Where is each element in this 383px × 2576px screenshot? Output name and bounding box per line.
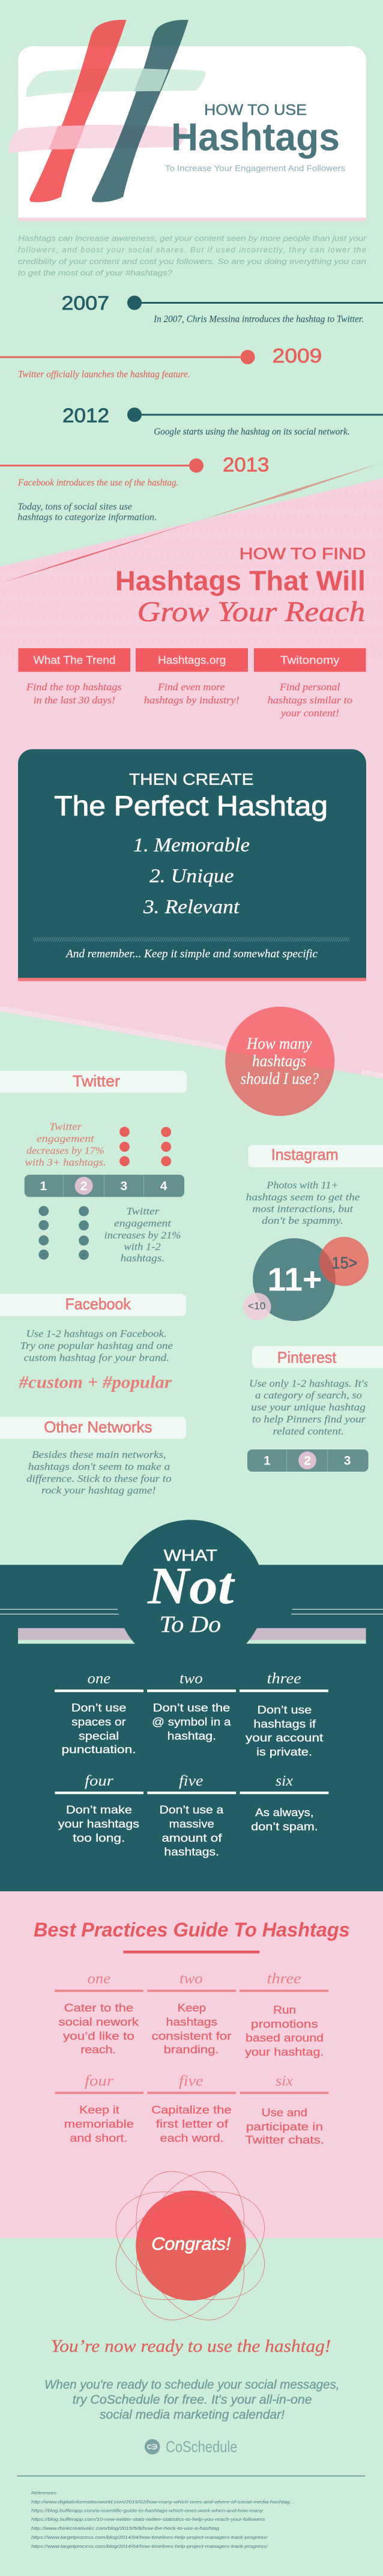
rule two: @ symbol in a: [152, 1716, 232, 1728]
panel: pinterest: Pinterest: [277, 1349, 337, 1367]
timeline: 2012: Google starts using the hashtag on its social network.: [154, 427, 350, 437]
practice one: reach.: [80, 2044, 116, 2056]
mint section background: [0, 1011, 383, 1565]
twitter increase text: [104, 1205, 181, 1264]
panel: what the trend: [18, 648, 130, 706]
hash pattern: #############################################################: [0, 562, 383, 571]
twitter increase text: with 1-2: [124, 1241, 161, 1252]
panel: what the trend: Find the top hashtags: [26, 681, 122, 693]
closing paragraph: [44, 2378, 340, 2422]
rule three: hashtags if: [253, 1718, 316, 1730]
hash pattern: #############################################################: [0, 550, 383, 559]
timeline: 2013: Facebook introduces the use of the hashtag.: [17, 478, 178, 488]
heading: grow your reach: Grow Your Reach: [137, 596, 365, 628]
intro paragraph: Hashtags can increase awareness, get your content seen by more people than just your: [18, 234, 367, 243]
practice five: five: [179, 2073, 203, 2089]
heading: how to find: HOW TO FIND: [240, 545, 366, 563]
logo: coschedule: CoSchedule: [166, 2438, 238, 2456]
closing note: And remember... Keep it simple and somewhat specific: [65, 948, 318, 960]
timeline: 2012: 2012: [62, 404, 109, 426]
closing paragraph: social media marketing calendar!: [100, 2408, 285, 2422]
practice four: and short.: [70, 2132, 127, 2144]
hash pattern: #############################################################: [0, 488, 383, 497]
rule one: Don’t use: [71, 1702, 126, 1714]
pink diagonal shape: [0, 478, 383, 1080]
timeline: 2007: In 2007, Chris Messina introduces the hashtag to Twitter.: [153, 314, 364, 325]
hash pattern: #############################################################: [0, 600, 383, 609]
panel: best practices: [0, 1891, 383, 2238]
references: References:: [31, 2490, 58, 2496]
title: hashtags: Hashtags: [171, 115, 340, 159]
panel: hashtags.org: [136, 648, 248, 706]
hash pattern: #############################################################: [0, 526, 383, 534]
logo: coschedule: [145, 2438, 238, 2456]
hash pattern: [0, 488, 383, 659]
hash pattern: #############################################################: [0, 588, 383, 597]
practice three: [240, 1970, 328, 2058]
panel: pink section background: [0, 960, 383, 1014]
rule three: is private.: [256, 1746, 312, 1758]
rule five: [147, 1773, 236, 1858]
hash pattern: #############################################################: [0, 649, 383, 659]
coral dots: -: [165, 1129, 167, 1135]
panel: twitonomy: your content!: [280, 707, 339, 718]
facebook text: Try one popular hashtag and one: [20, 1340, 173, 1351]
heading: how to find: [115, 545, 366, 628]
twitter decrease text: decreases by 17%: [26, 1145, 104, 1156]
twitter decrease text: [25, 1121, 106, 1168]
panel: the perfect hashtag: [18, 749, 366, 981]
callout: how many hashtags: How many: [246, 1034, 312, 1052]
panel: twitonomy: Find personal: [279, 681, 340, 693]
rule one: punctuation.: [61, 1744, 136, 1756]
panel: hashtags.org: hashtags by industry!: [144, 694, 240, 706]
hash pattern: #############################################################: [0, 513, 383, 522]
panel: what the trend: What The Trend: [34, 654, 116, 666]
practice one: Cater to the: [64, 2002, 133, 2014]
number bar: [25, 1175, 184, 1197]
title: how to use: HOW TO USE: [204, 103, 307, 119]
bubble chart: 15>: [332, 1253, 357, 1272]
practice three: based around: [246, 2032, 324, 2044]
hash pattern: #############################################################: [0, 612, 383, 621]
panel: twitonomy: [254, 648, 366, 718]
coral dots: -: [124, 1129, 125, 1135]
timeline: 2007: [61, 292, 383, 325]
pinterest text: to help Pinners find your: [252, 1413, 366, 1425]
heading: to do: To Do: [160, 1612, 221, 1637]
practice five: first letter of: [156, 2118, 229, 2130]
rule two: hashtag.: [167, 1730, 216, 1742]
timeline closing note: [17, 502, 157, 523]
closing paragraph: try CoSchedule for free. It's your all-in-one: [73, 2393, 312, 2407]
timeline: 2013: 2013: [223, 454, 269, 476]
rule six: As always,: [255, 1807, 313, 1819]
timeline: 2012: [62, 404, 383, 437]
practice one: you’d like to: [63, 2030, 134, 2042]
number bar: 1: [264, 1454, 271, 1468]
rule five: amount of: [161, 1832, 223, 1844]
pinterest text: Use only 1-2 hashtags. It's: [249, 1378, 368, 1389]
panel: facebook: Facebook: [65, 1295, 131, 1313]
pinterest text: a category of search, so: [255, 1389, 362, 1401]
number bar: [247, 1449, 369, 1472]
practice four: memoriable: [64, 2118, 134, 2130]
rule four: four: [85, 1773, 113, 1789]
teal dots: +: [41, 1251, 46, 1259]
callout: how many hashtags: hashtags: [252, 1052, 306, 1070]
rule four: [55, 1773, 143, 1844]
other networks text: Besides these main networks,: [32, 1449, 166, 1460]
practice five: each word.: [160, 2132, 224, 2144]
bubble chart: [243, 1237, 369, 1321]
practice four: Keep it: [79, 2104, 119, 2116]
intro paragraph: credibility of your content and cost you followers. So are you doing everything you can: [18, 257, 366, 266]
references: http://www.thinkcreativekc.com/blog/2015/5/8/how-the-heck-to-use-a-hashtag: [31, 2526, 220, 2531]
heading: then create: THEN CREATE: [129, 771, 253, 789]
rule two: Don’t use the: [153, 1702, 230, 1714]
teal dots: +: [82, 1251, 86, 1259]
panel: hashtags.org: Find even more: [157, 681, 225, 693]
rule two: two: [179, 1670, 203, 1687]
hash pattern: #############################################################: [0, 501, 383, 510]
other networks text: rock your hashtag game!: [41, 1484, 156, 1496]
rule three: [240, 1670, 328, 1758]
practice two: Keep: [178, 2002, 206, 2014]
panel: other networks: [0, 1417, 186, 1496]
rule five: Don’t use a: [160, 1804, 224, 1816]
other networks text: difference. Stick to these four to: [26, 1473, 172, 1484]
panel: what the trend: in the last 30 days!: [34, 694, 115, 706]
teal dots: [38, 1206, 89, 1260]
twitter increase text: Twitter: [126, 1205, 160, 1217]
practice six: six: [276, 2073, 293, 2089]
rule one: [55, 1670, 143, 1756]
twitter increase text: increases by 21%: [104, 1229, 181, 1241]
practice four: four: [85, 2073, 113, 2089]
panel: other networks: Other Networks: [44, 1418, 152, 1436]
hashtag formula: #custom + #popular: [19, 1373, 172, 1392]
instagram text: most interactions, but: [252, 1203, 353, 1215]
panel: twitonomy: hashtags similar to: [268, 694, 352, 706]
rule three: three: [267, 1670, 301, 1687]
facebook text: [20, 1328, 173, 1363]
twitter increase text: engagement: [114, 1217, 171, 1229]
heading: what: WHAT: [164, 1547, 217, 1565]
rule one: special: [79, 1730, 119, 1742]
hash pattern: #############################################################: [0, 538, 383, 547]
panel: what not to do: [0, 1520, 383, 1891]
coral dots: [119, 1127, 171, 1166]
panel: instagram: Instagram: [271, 1146, 339, 1164]
bubble chart: 11+: [268, 1261, 322, 1298]
practice two: branding.: [164, 2044, 219, 2056]
timeline: 2007: 2007: [61, 292, 109, 314]
rule five: five: [179, 1773, 203, 1789]
practice five: Capitalize the: [151, 2104, 232, 2116]
practice two: [147, 1970, 236, 2056]
bubble chart: <10: [248, 1301, 265, 1312]
number bar: 2: [80, 1179, 87, 1193]
rule one: one: [88, 1670, 110, 1687]
facebook text: Use 1-2 hashtags on Facebook.: [26, 1328, 167, 1339]
intro paragraph: to get the most out of your #hashtags?: [18, 268, 173, 277]
heading: not: Not: [147, 1557, 235, 1616]
practice one: [55, 1970, 143, 2056]
practice two: two: [179, 1970, 203, 1987]
other networks text: [26, 1449, 172, 1496]
rule six: don’t spam.: [251, 1820, 318, 1832]
references: http://www.digitalinformationworld.com/2015/02/how-many-which-ones-and-where-of-social-media-hashtag...: [31, 2499, 294, 2505]
practice one: social nework: [59, 2016, 139, 2028]
callout: how many hashtags: should I use?: [241, 1070, 319, 1088]
timeline: 2009: [0, 345, 322, 379]
hash pattern: #############################################################: [0, 575, 383, 584]
panel: twitter: Twitter: [73, 1072, 120, 1090]
rule five: hashtags.: [164, 1846, 219, 1858]
rule one: spaces or: [71, 1716, 126, 1728]
instagram text: [246, 1179, 360, 1226]
list: unique: 2. Unique: [149, 865, 234, 887]
rule four: too long.: [73, 1832, 125, 1844]
hash pattern: #############################################################: [0, 625, 383, 634]
intro paragraph: [18, 234, 367, 277]
heading: best practices: Best Practices Guide To Hashtags: [34, 1919, 350, 1941]
timeline: 2009: 2009: [273, 345, 322, 367]
rule six: six: [276, 1773, 293, 1789]
practice four: [55, 2073, 143, 2144]
rule six: [240, 1773, 328, 1832]
rule four: your hashtags: [58, 1818, 139, 1830]
number bar: 3: [344, 1454, 351, 1468]
practice five: [147, 2073, 236, 2144]
twitter increase text: hashtags.: [121, 1253, 164, 1264]
rule five: massive: [169, 1818, 214, 1830]
panel: facebook: [0, 1294, 186, 1392]
timeline closing note: Today, tons of social sites use: [17, 502, 132, 512]
panel: pinterest: [247, 1346, 383, 1472]
number bar: 1: [40, 1179, 47, 1193]
twitter decrease text: engagement: [37, 1133, 94, 1144]
heading: hashtags that will: Hashtags That Will: [115, 565, 366, 596]
congrats badge: Congrats!: [151, 2234, 231, 2254]
rule three: your account: [246, 1732, 323, 1744]
panel: twitonomy: Twitonomy: [280, 654, 340, 666]
timeline: 2013: [0, 454, 269, 488]
instagram text: don't be spammy.: [262, 1215, 343, 1226]
practice three: promotions: [251, 2018, 318, 2030]
pinterest text: [249, 1378, 368, 1437]
number bar: 4: [160, 1179, 167, 1193]
closing paragraph: When you're ready to schedule your social messages,: [44, 2378, 340, 2392]
closing headline: You’re now ready to use the hashtag!: [51, 2336, 331, 2356]
callout: how many hashtags: [225, 1007, 334, 1116]
references: https://blog.bufferapp.com/10-new-twitter-stats-twitter-statistics-to-help-you-reach-your-followers: [31, 2517, 265, 2522]
pinterest text: related content.: [273, 1425, 344, 1437]
practice six: Use and: [262, 2107, 307, 2119]
references: [31, 2490, 294, 2549]
rule three: Don’t use: [257, 1704, 312, 1716]
twitter decrease text: with 3+ hashtags.: [25, 1157, 106, 1168]
practice six: Twitter chats.: [245, 2134, 324, 2146]
practice six: participate in: [246, 2120, 323, 2132]
practice three: your hashtag.: [245, 2046, 324, 2058]
diagonal brush stroke: [0, 462, 383, 583]
heading: the perfect hashtag: The Perfect Hashtag: [54, 790, 328, 821]
panel: instagram: [243, 1145, 383, 1321]
timeline closing note: hashtags to categorize information.: [17, 513, 157, 523]
practice two: hashtags: [166, 2016, 217, 2028]
references: https://blog.bufferapp.com/a-scientific-guide-to-hashtags-which-ones-work-when-and-how-many: [31, 2508, 264, 2513]
other networks text: hashtags don't seem to make a: [28, 1461, 170, 1472]
references: https://www.targetprocess.com/blog/2014/04/how-timelines-help-project-managers-track-progress/: [31, 2535, 268, 2540]
rule two: [147, 1670, 236, 1742]
subtitle: To Increase Your Engagement And Followers: [165, 163, 345, 173]
congrats badge: [115, 2171, 265, 2320]
references: https://www.targetprocess.com/blog/2014/04/how-timelines-help-project-managers-track-progress/: [31, 2544, 268, 2549]
icon: hashtag symbol: [8, 20, 206, 202]
hash pattern: #############################################################: [0, 637, 383, 646]
list: memorable: 1. Memorable: [133, 834, 250, 856]
panel: hashtags.org: Hashtags.org: [158, 654, 226, 666]
number bar: 3: [120, 1179, 127, 1193]
practice one: one: [88, 1970, 110, 1987]
practice three: Run: [273, 2004, 296, 2016]
practice two: consistent for: [152, 2030, 232, 2042]
timeline: 2009: Twitter officially launches the hashtag feature.: [18, 369, 190, 379]
panel: title card: [8, 20, 366, 221]
instagram text: Photos with 11+: [266, 1179, 339, 1191]
instagram text: hashtags seem to get the: [246, 1191, 360, 1203]
twitter decrease text: Twitter: [49, 1121, 82, 1132]
intro paragraph: followers, and boost your social shares. But if used incorrectly, they can lower the: [18, 245, 366, 254]
logo: coschedule: C∋: [147, 2444, 157, 2451]
number bar: 2: [304, 1454, 311, 1468]
practice six: [240, 2073, 328, 2146]
panel: twitter: [0, 1071, 187, 1264]
list: relevant: 3. Relevant: [143, 897, 240, 918]
rule four: Don’t make: [66, 1804, 132, 1816]
practice three: three: [267, 1970, 301, 1987]
pinterest text: use your unique hashtag: [251, 1401, 366, 1413]
facebook text: custom hashtag for your brand.: [24, 1352, 169, 1363]
